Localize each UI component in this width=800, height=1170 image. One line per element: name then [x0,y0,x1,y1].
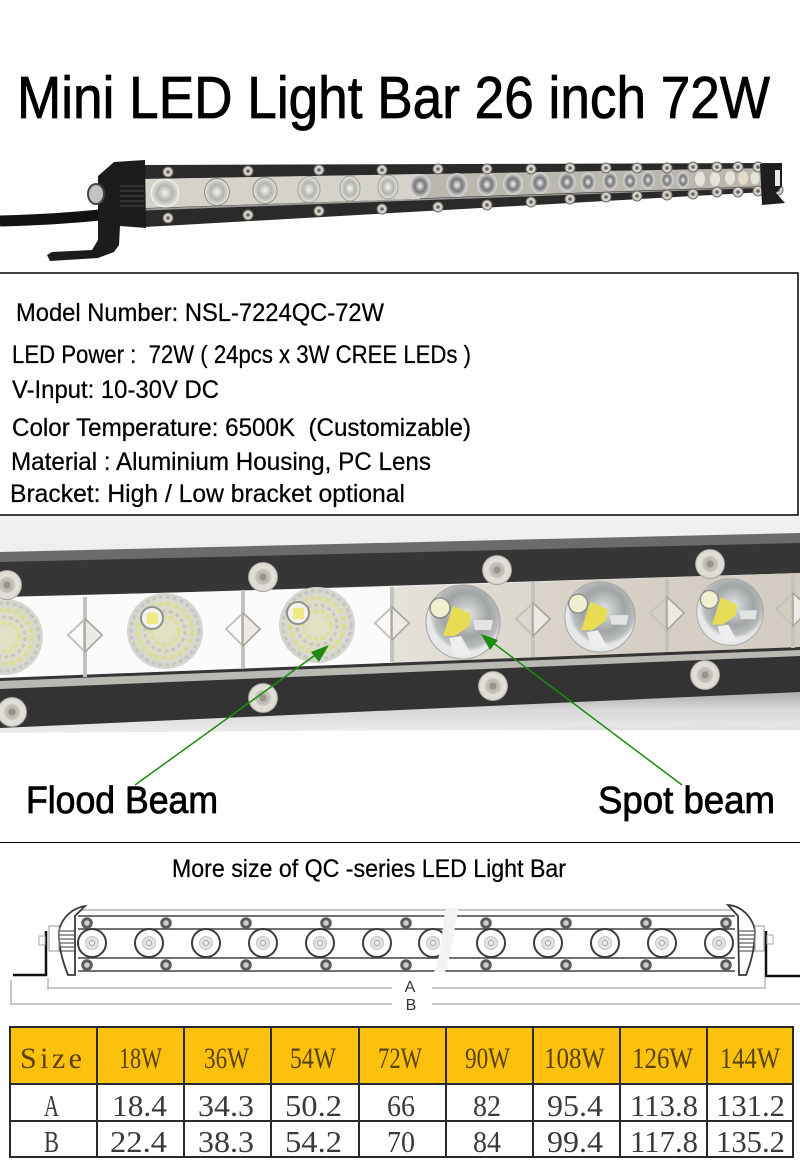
dimension diagram: B [406,997,416,1014]
row A: 34.3 [198,1088,254,1123]
label: spot beam: Spot beam [598,780,775,822]
spec: LED power: LED Power : 72W ( 24pcs x 3W CREE LEDs ) [12,341,471,369]
spec: model number: Model Number: NSL-7224QC-72W [16,299,384,327]
row A: A [44,1088,59,1123]
header row fill [10,1027,793,1084]
shadow under bar [0,690,800,733]
lower rail [0,656,800,728]
header labels: 54W [290,1042,337,1075]
row A [44,1088,785,1123]
table grid [10,1027,793,1157]
LED strip [145,168,770,208]
cable [0,215,100,221]
bar rails [78,910,735,971]
spec: material: Material : Aluminium Housing, PC Lens [11,448,431,476]
spec: bracket: Bracket: High / Low bracket optional [10,480,405,508]
row B: 22.4 [110,1124,168,1159]
header labels: Size [20,1042,82,1075]
flood lenses [0,587,355,675]
arrow: flood beam [135,645,329,785]
chrome strip [0,649,800,690]
row A: 18.4 [112,1088,168,1123]
screws [0,549,725,727]
row B: 99.4 [547,1124,604,1159]
lenses [78,929,733,957]
row A: 50.2 [285,1088,342,1123]
header labels: 90W [465,1042,511,1075]
header labels [20,1042,781,1075]
right end bracket [760,163,785,205]
bar top face [0,533,800,564]
row A: 66 [387,1088,415,1123]
row B: B [44,1124,59,1159]
row B: 54.2 [285,1124,342,1159]
bar housing [145,163,782,227]
row B: 38.3 [198,1124,254,1159]
label: flood beam: Flood Beam [26,780,218,822]
row A: 82 [473,1088,501,1123]
header labels: 72W [378,1042,423,1075]
header labels: 126W [632,1042,694,1075]
spec: voltage: V-Input: 10-30V DC [12,376,219,404]
dimension labels: A [405,979,416,996]
row B: 135.2 [716,1124,785,1159]
dividers [85,574,793,677]
break mark [434,908,459,972]
panel: close-up photo of flood and spot lenses [0,516,800,733]
row B: 84 [473,1124,501,1159]
upper rail [0,543,800,598]
row B [44,1124,785,1159]
size table [10,1027,793,1159]
dimension diagram [11,905,800,1014]
spot lenses [426,579,763,659]
panel: specifications [0,273,798,515]
LED lenses [151,171,772,207]
row A: 113.8 [630,1088,698,1123]
header labels: 36W [204,1042,250,1075]
divider line [0,842,800,843]
left end cap and bracket [47,160,146,261]
dimension lines [11,978,800,1005]
diamond marks [68,593,800,652]
header labels: 144W [720,1042,781,1075]
spec: color temperature: Color Temperature: 6500K (Customizable) [12,414,471,442]
screws [81,917,732,971]
product photo: LED light bar [0,160,785,261]
row B: 117.8 [630,1124,698,1159]
header labels: 18W [119,1042,162,1075]
mounting bolt [88,184,104,204]
right end cap and bracket [728,905,800,976]
arrow: spot beam [481,634,682,785]
row A: 95.4 [547,1088,604,1123]
lens plate: flood side [0,587,392,679]
row A: 131.2 [716,1088,785,1123]
row B: 70 [387,1124,415,1159]
header labels: 108W [544,1042,606,1075]
heading: more sizes: More size of QC -series LED Light Bar [172,855,566,883]
lens plate: spot side [392,573,800,663]
left end cap and bracket [13,906,85,975]
bar screws [163,162,783,223]
